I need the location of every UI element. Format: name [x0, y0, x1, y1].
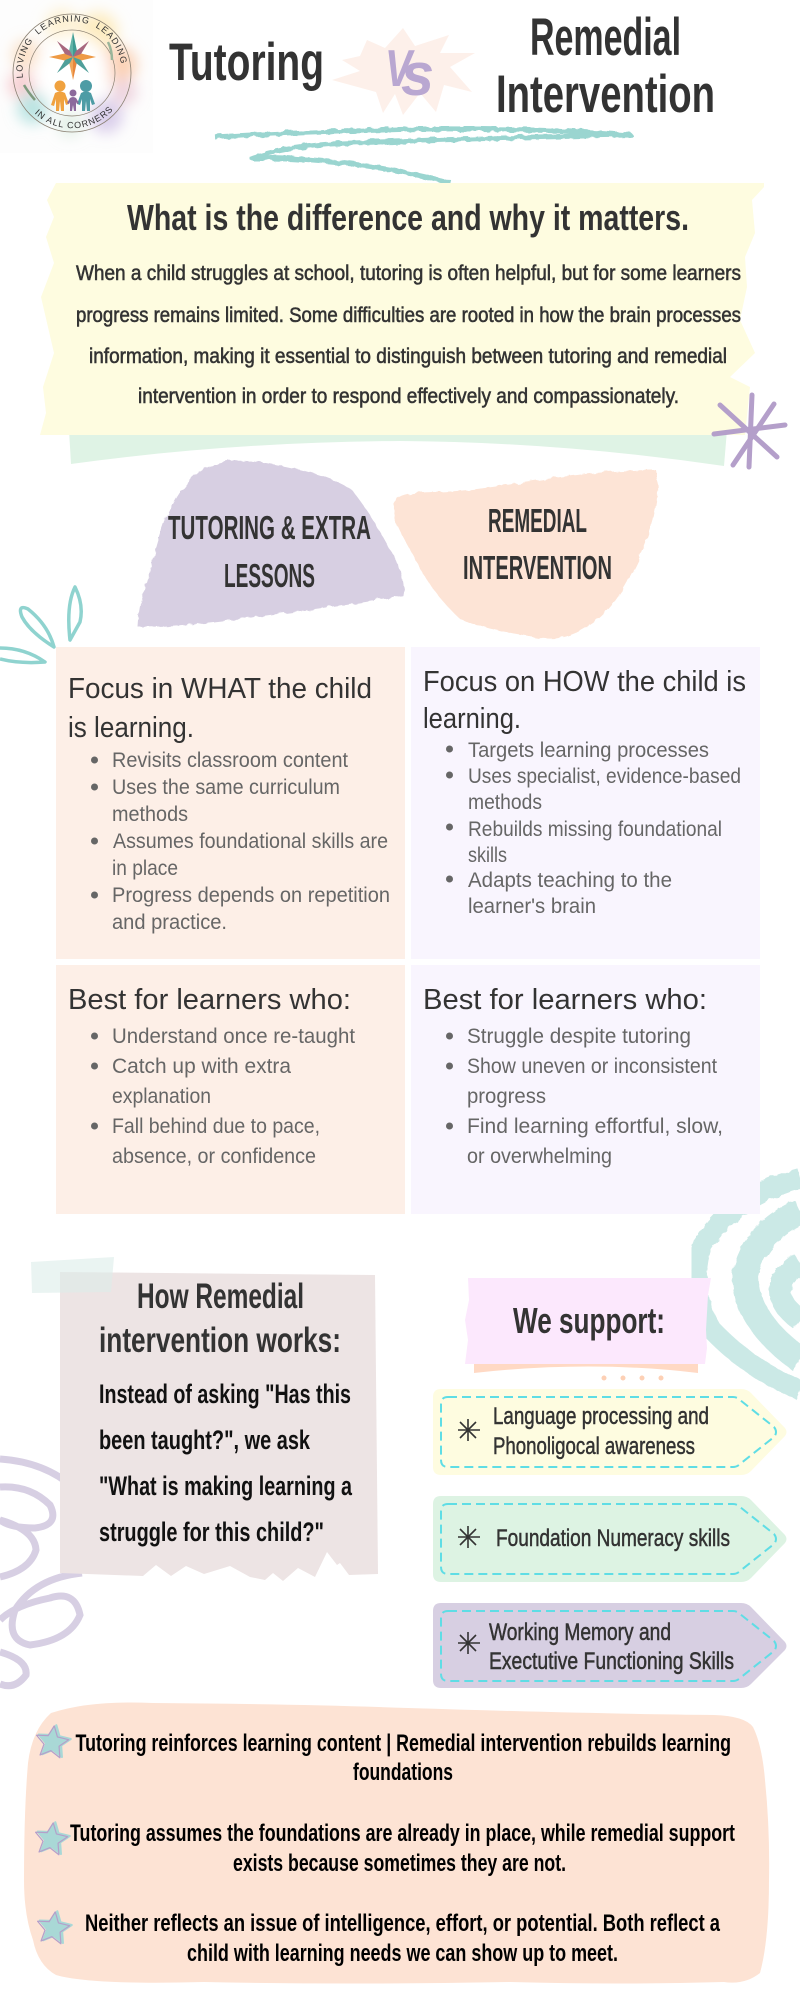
- bullet list: [446, 739, 741, 918]
- icon: teal leaves: [0, 587, 81, 663]
- takeaway 2: exists because sometimes they are not.: [233, 1850, 566, 1877]
- body text: [99, 1379, 353, 1547]
- bullet list: in place: [112, 857, 178, 880]
- tag: working memory: Exectutive Functioning Skills: [489, 1648, 734, 1675]
- intro body text: [76, 262, 741, 408]
- tag: language processing: Phonoligocal awareness: [493, 1433, 695, 1460]
- tag: foundation numeracy: [433, 1496, 786, 1582]
- bullet list: [446, 1025, 723, 1168]
- icon: purple asterisk: [714, 395, 785, 467]
- logo: loving learning leading in all corners: [2, 3, 145, 140]
- panel: key takeaways: [24, 1702, 769, 1984]
- takeaway 3: child with learning needs we can show up to meet.: [187, 1940, 618, 1967]
- intro body text: When a child struggles at school, tutoring is often helpful, but for some learners: [76, 262, 741, 285]
- body text: struggle for this child?": [99, 1517, 324, 1547]
- tag: language processing: Language processing and: [493, 1403, 709, 1430]
- bullet list: Rebuilds missing foundational: [468, 818, 722, 841]
- blob: remedial intervention: INTERVENTION: [463, 549, 612, 586]
- bullet list: or overwhelming: [467, 1145, 612, 1168]
- heading: How Remedial: [137, 1277, 304, 1316]
- tape: [31, 1257, 114, 1293]
- body text: Instead of asking "Has this: [99, 1379, 351, 1409]
- intro body text: intervention in order to respond effectively and compassionately.: [138, 385, 679, 408]
- bullet list: [91, 1025, 355, 1168]
- takeaway 3: [35, 1909, 720, 1967]
- vs badge: s: [401, 41, 434, 108]
- body text: been taught?", we ask: [99, 1425, 311, 1455]
- decorative teal swoosh: [215, 129, 630, 183]
- heading: Best for learners who:: [423, 984, 707, 1016]
- panel: we support heading: We support:: [513, 1300, 665, 1341]
- panel: best for learners, remedial: [411, 965, 760, 1214]
- blob: remedial intervention: [393, 470, 658, 639]
- bullet list: Struggle despite tutoring: [467, 1025, 691, 1048]
- bullet list: Show uneven or inconsistent: [467, 1055, 717, 1078]
- bullet list: Assumes foundational skills are: [113, 830, 388, 853]
- intro body text: information, making it essential to distinguish between tutoring and remedial: [89, 345, 727, 368]
- heading: intervention works:: [99, 1321, 341, 1360]
- vs badge: [332, 28, 475, 115]
- blob: tutoring and extra lessons: [138, 460, 404, 627]
- bullet list: progress: [467, 1085, 546, 1108]
- tag: working memory: Working Memory and: [489, 1619, 671, 1646]
- panel: intro: [40, 183, 764, 435]
- bullet list: Fall behind due to pace,: [112, 1115, 320, 1138]
- blob: tutoring and extra lessons: TUTORING & EXTRA: [168, 509, 371, 546]
- heading: learning.: [423, 703, 521, 735]
- panel: how remedial intervention works: [31, 1257, 378, 1581]
- bullet list: methods: [112, 803, 188, 826]
- takeaway 2: [33, 1820, 735, 1877]
- takeaway 1: [34, 1723, 731, 1786]
- title: Tutoring: Tutoring: [169, 33, 324, 92]
- bullet list: methods: [468, 791, 542, 814]
- heading: [99, 1277, 341, 1360]
- bullet list: Progress depends on repetition: [112, 884, 390, 907]
- blob: remedial intervention: REMEDIAL: [488, 502, 587, 539]
- heading: is learning.: [68, 712, 194, 744]
- title: Remedial Intervention: [496, 8, 715, 124]
- decorative lavender squiggle: [0, 1459, 82, 1686]
- panel: best for learners, tutoring: [56, 965, 405, 1214]
- bullet list: absence, or confidence: [112, 1145, 316, 1168]
- bullet list: Catch up with extra: [112, 1055, 291, 1078]
- bullet list: Understand once re-taught: [112, 1025, 355, 1048]
- heading: [68, 673, 372, 744]
- title: Remedial Intervention: Intervention: [496, 65, 715, 124]
- heading: [423, 666, 746, 735]
- logo: loving learning leading in all corners: IN ALL CORNERS: [35, 106, 112, 128]
- bullet list: learner's brain: [468, 895, 596, 918]
- heading: Focus in WHAT the child: [68, 673, 372, 705]
- logo: loving learning leading in all corners: LOVING LEARNING LEADING: [16, 15, 127, 78]
- title: Remedial Intervention: Remedial: [530, 8, 681, 67]
- tag: language processing: [433, 1389, 786, 1475]
- body text: "What is making learning a: [99, 1471, 353, 1501]
- blob: tutoring and extra lessons: LESSONS: [224, 557, 315, 594]
- bullet list: skills: [468, 844, 507, 867]
- bullet list: Targets learning processes: [468, 739, 709, 762]
- decorative teal spiral: [697, 1178, 800, 1390]
- bullet list: Revisits classroom content: [112, 749, 348, 772]
- vs badge: V: [385, 40, 415, 98]
- bullet list: and practice.: [112, 911, 227, 934]
- bullet list: explanation: [112, 1085, 211, 1108]
- heading: Best for learners who:: [68, 984, 351, 1016]
- heading: Focus on HOW the child is: [423, 666, 746, 698]
- panel: focus in what: [56, 647, 405, 959]
- bullet list: [91, 749, 390, 934]
- bullet list: Find learning effortful, slow,: [467, 1115, 723, 1138]
- tag: working memory: [433, 1603, 786, 1688]
- bullet list: Uses specialist, evidence-based: [468, 765, 741, 788]
- takeaway 1: foundations: [353, 1759, 453, 1786]
- mint ribbon behind intro panel: [69, 430, 727, 466]
- bullet list: Adapts teaching to the: [468, 869, 672, 892]
- tag: foundation numeracy: Foundation Numeracy skills: [496, 1525, 730, 1552]
- panel: focus on how: [411, 647, 760, 959]
- bullet list: Uses the same curriculum: [112, 776, 340, 799]
- panel: we support heading: [465, 1278, 711, 1380]
